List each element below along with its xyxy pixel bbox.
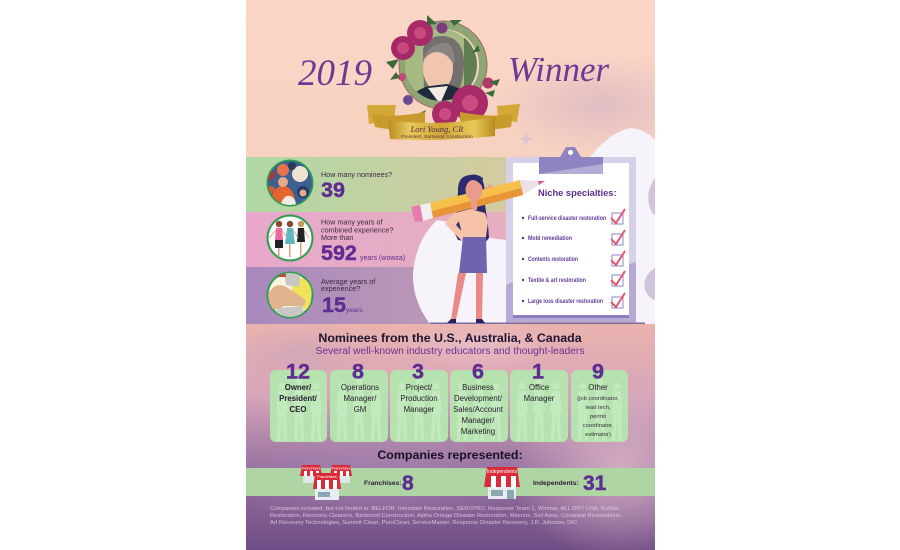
icon: independent store: Independents <box>487 469 518 475</box>
icon: franchise stores <box>300 465 352 500</box>
independents number: 31 <box>583 472 607 495</box>
footnote: Companies included, but not limited to: BELFOR, Interstate Restoration, SERVPRO, Response Team 1, Winmar, ALL DRY USA, Buffalo <box>270 506 619 512</box>
ribbon banner <box>367 104 520 140</box>
nominees subheading: Several well-known industry educators and thought-leaders <box>316 346 584 357</box>
role card: other: lead tech, <box>585 405 611 411</box>
question: More than <box>321 233 353 242</box>
icon: independent store <box>484 467 520 499</box>
clipboard heading: Niche specialties: <box>538 188 617 198</box>
role card: other <box>571 360 628 442</box>
arm on pencil <box>483 184 498 198</box>
list item: contents: Contents restoration <box>528 257 578 263</box>
role card: other: permit <box>590 414 606 420</box>
role card: office manager: Office <box>529 383 549 392</box>
icon: three women holding hands <box>266 214 314 262</box>
white blob behind clipboard <box>590 128 655 324</box>
body <box>455 209 488 237</box>
question: How many nominees? <box>321 170 392 179</box>
role card: business development: 6 <box>472 360 484 384</box>
star sparkle <box>519 131 533 147</box>
stat: years of experience <box>266 214 405 265</box>
number: 39 <box>321 178 345 202</box>
role card: office manager: Manager <box>524 394 555 403</box>
role card: owner: Owner/ <box>285 383 312 392</box>
companies heading: Companies represented: <box>377 448 523 462</box>
question: combined experience? <box>321 226 393 234</box>
stat: nominees <box>265 160 392 206</box>
role card: project: Manager <box>404 405 435 414</box>
list item: large loss: Large loss disaster restoration <box>528 299 603 305</box>
role card: operations <box>330 360 388 442</box>
unit: years (wowza) <box>360 255 405 262</box>
side blobs <box>644 178 655 300</box>
role card: office manager: 1 <box>532 360 544 384</box>
role card: business development: Sales/Account <box>453 405 504 414</box>
number: 592 <box>321 241 357 265</box>
question: experience? <box>321 284 360 293</box>
franchises label: Franchises: <box>364 480 402 487</box>
list item: full-service <box>522 209 625 224</box>
list item: mold: Mold remediation <box>528 236 572 242</box>
question: Average years of <box>321 277 375 286</box>
footnote: Restoration, Recovery Cleaners, Bartwood Construction, Alpha Omega Disaster Restoration, Maxons, Soil Away, Compleat Restorations, <box>270 513 622 519</box>
franchises number: 8 <box>402 472 414 495</box>
icon: flexed arm <box>266 272 314 318</box>
list item: full-service: Full-service disaster restoration <box>528 216 606 222</box>
icon: franchise stores: Franchises <box>317 474 337 479</box>
role card: business development: Manager/ <box>462 416 495 425</box>
woman with pencil <box>411 174 545 323</box>
white blob backdrop <box>413 220 506 324</box>
role card: other: 9 <box>592 360 604 384</box>
role card: office manager <box>510 360 568 442</box>
role card: project: Production <box>400 394 438 403</box>
role card: project: 3 <box>412 360 424 384</box>
pencil <box>411 180 545 222</box>
role card: operations: 8 <box>352 360 364 384</box>
stat bands <box>246 157 508 324</box>
role card: other: (job coordinator, <box>577 396 619 402</box>
number: 15 <box>322 293 346 317</box>
list item: large loss <box>522 293 625 308</box>
role card: owner <box>270 360 327 442</box>
clipboard <box>506 147 636 322</box>
poster background <box>246 0 655 550</box>
stat: average experience <box>266 272 375 318</box>
role card: operations: GM <box>354 405 366 414</box>
role card: operations: Operations <box>341 383 379 392</box>
winner role: President, Bartwood Construction <box>401 134 473 140</box>
role card: business development: Marketing <box>461 427 495 436</box>
question: How many years of <box>321 218 383 226</box>
role card: other: coordinator, <box>583 423 614 429</box>
footnote: Art Recovery Technologies, Summit Clean, PuroClean, ServiceMaster, Response Disaster Recovery, J.R. Johnson, DKI <box>270 520 577 526</box>
role card: business development <box>450 360 508 442</box>
role card: owner: CEO <box>290 405 306 414</box>
winner name: Lori Young, CR <box>410 124 464 134</box>
role card: operations: Manager/ <box>344 394 377 403</box>
clipboard clip <box>539 147 603 174</box>
companies band <box>246 468 655 496</box>
role card: other: estimator) <box>585 432 611 438</box>
unit: years <box>346 307 363 314</box>
ground line <box>430 322 645 324</box>
list item: textile: Textile & art restoration <box>528 278 586 284</box>
icon: franchise stores: Franchises <box>302 466 320 470</box>
role card: owner: President/ <box>279 394 318 403</box>
role card: project <box>390 360 448 442</box>
icon: group of women <box>265 160 314 206</box>
title: 2019: 2019 <box>298 53 372 94</box>
independents label: Independents: <box>533 480 579 487</box>
list item: contents <box>522 251 625 266</box>
role card: business development: Development/ <box>454 394 503 403</box>
role card: owner: 12 <box>286 360 310 384</box>
list item: mold <box>522 230 625 245</box>
role card: business development: Business <box>462 383 494 392</box>
icon: franchise stores: Franchises <box>332 466 350 470</box>
nominees heading: Nominees from the U.S., Australia, & Canada <box>318 331 582 345</box>
hair back <box>454 175 489 244</box>
title: Winner: Winner <box>508 50 609 89</box>
portrait wreath <box>386 15 500 127</box>
role card: project: Project/ <box>406 383 433 392</box>
list item: textile <box>522 271 625 286</box>
role card: other: Other <box>588 383 608 392</box>
